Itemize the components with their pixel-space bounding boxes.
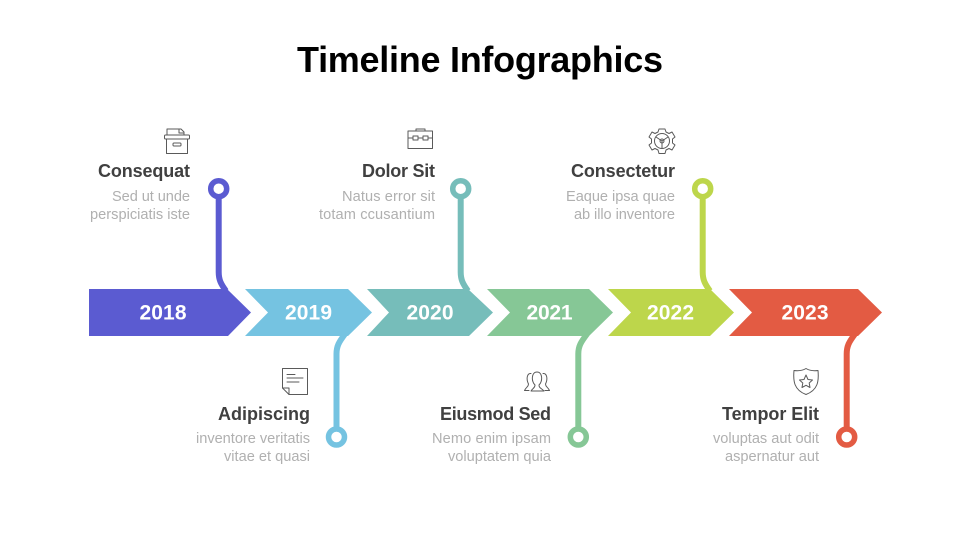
text block: Consectetur: ab illo inventore [574, 207, 675, 223]
arrow: 2020: 2020 [406, 302, 454, 324]
text block: Tempor Elit: voluptas aut odit [713, 431, 819, 447]
text block: Consequat: Consequat [98, 161, 190, 181]
arrow: 2022: 2022 [647, 302, 694, 324]
text block: Tempor Elit: Tempor Elit [722, 404, 819, 424]
arrow: 2018: 2018 [140, 302, 187, 324]
arrow: 2019: 2019 [285, 302, 332, 324]
arrow: 2021 [487, 289, 613, 336]
icon: note [282, 368, 308, 394]
text block: Consectetur: Eaque ipsa quae [566, 189, 675, 205]
text block: Adipiscing: inventore veritatis [196, 431, 310, 447]
text block: Eiusmod Sed: voluptatem quia [448, 449, 552, 465]
icon: archive box [164, 129, 190, 154]
text block: Consequat [90, 129, 190, 223]
icon: shield with star [794, 368, 818, 394]
icon: briefcase [408, 129, 432, 148]
text block: Consectetur [566, 129, 675, 223]
text block: Eiusmod Sed: Nemo enim ipsam [432, 431, 551, 447]
text block: Adipiscing: Adipiscing [218, 404, 310, 424]
arrow: 2023: 2023 [782, 302, 828, 324]
text block: Adipiscing [196, 368, 310, 465]
text block: Dolor Sit: totam ccusantium [319, 207, 435, 223]
connector: 2023 [839, 334, 855, 445]
connector: 2022 [695, 181, 711, 291]
text block: Dolor Sit [319, 129, 435, 223]
arrow: 2023 [729, 289, 882, 336]
text block: Dolor Sit: Dolor Sit [362, 161, 435, 181]
text block: Consequat: Sed ut unde [112, 189, 190, 205]
arrow: 2022 [608, 289, 734, 336]
icon: people [524, 372, 550, 391]
arrow: 2018 [89, 289, 251, 336]
icon: gear [649, 129, 675, 154]
connector: 2020 [453, 181, 469, 291]
connector: 2021 [570, 334, 587, 445]
title: Timeline Infographics [297, 39, 663, 80]
text block: Eiusmod Sed: Eiusmod Sed [440, 404, 551, 424]
text block: Consectetur: Consectetur [571, 161, 675, 181]
text block: Consequat: perspiciatis iste [90, 207, 190, 223]
text block: Tempor Elit: aspernatur aut [725, 449, 819, 465]
connector: 2018 [211, 181, 227, 291]
arrow: 2020 [367, 289, 493, 336]
text block: Eiusmod Sed [432, 372, 552, 465]
arrow: 2021: 2021 [526, 302, 573, 324]
text block: Tempor Elit [713, 368, 819, 465]
arrow: 2019 [245, 289, 372, 336]
connector: 2019 [328, 334, 345, 445]
text block: Adipiscing: vitae et quasi [224, 449, 310, 465]
text block: Dolor Sit: Natus error sit [342, 189, 435, 205]
